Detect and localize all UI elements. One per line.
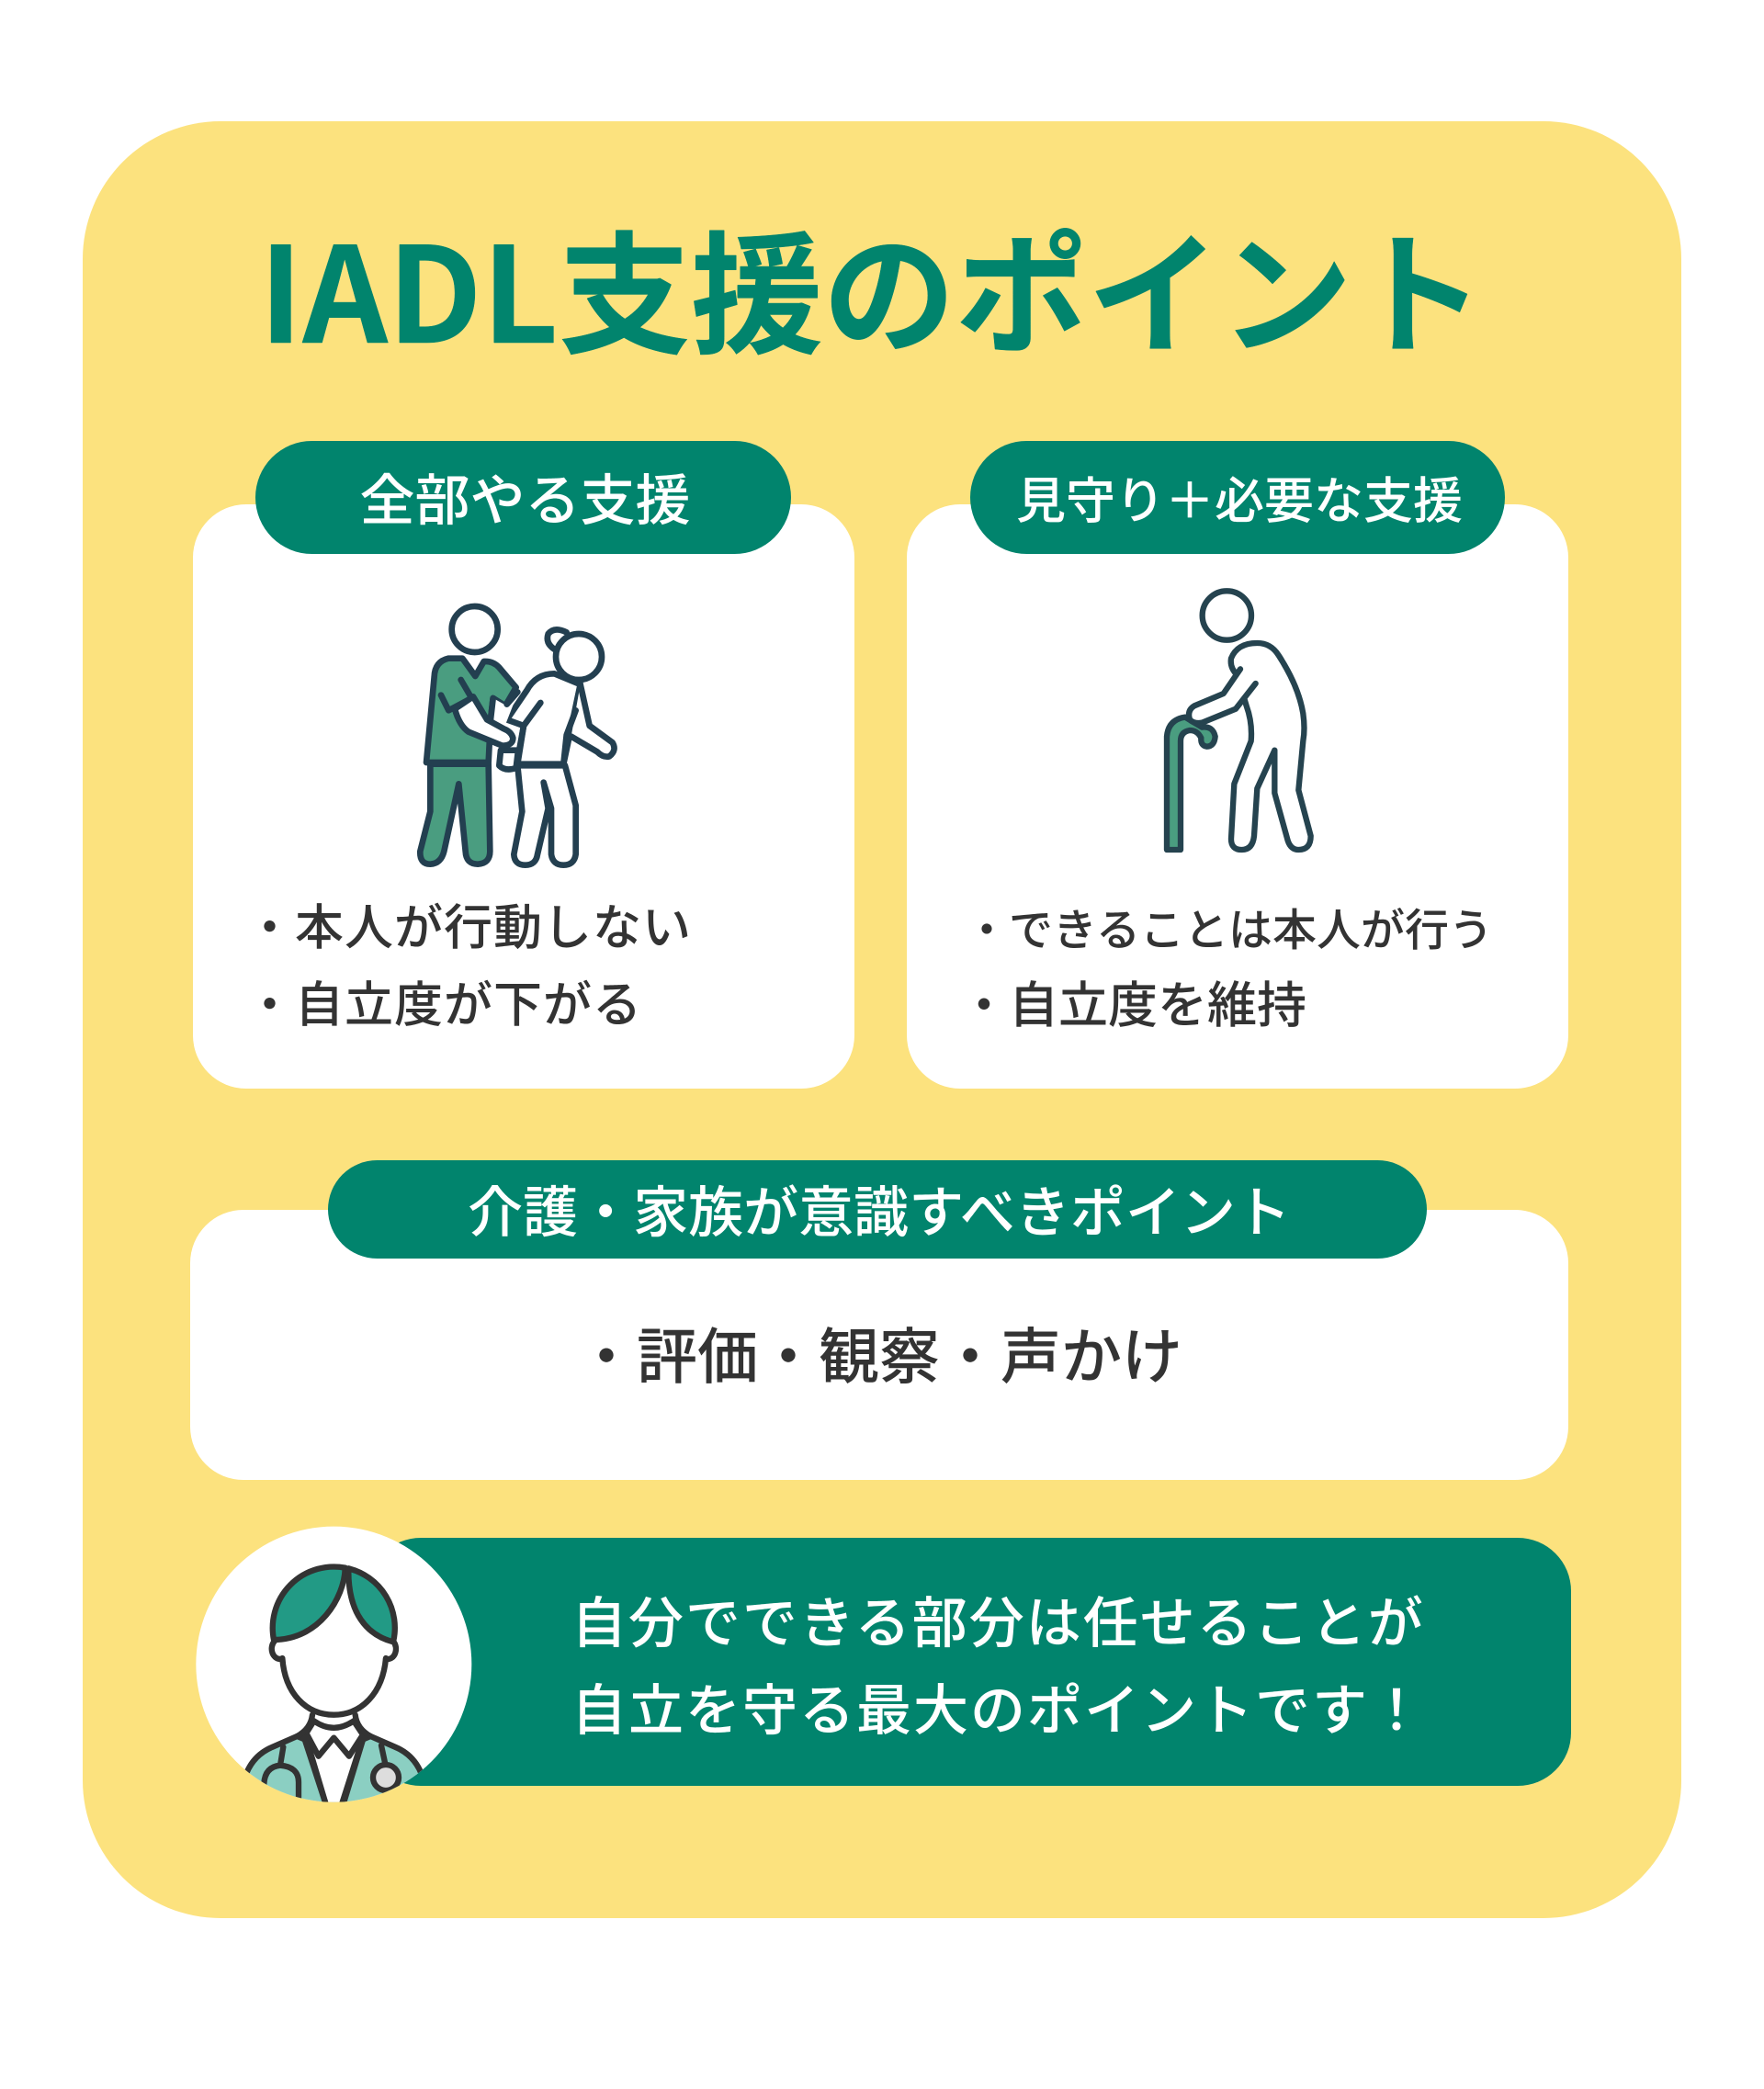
bullet: maintain independence: ・自立度を維持 bbox=[959, 965, 1306, 1037]
icon: elderly person with cane bbox=[1163, 588, 1314, 853]
line one: 自分でできる部分は任せることが bbox=[571, 1579, 1425, 1659]
icon: caregiver supporting patient bbox=[417, 603, 617, 868]
bullet: independence falls: ・自立度が下がる bbox=[245, 966, 642, 1036]
bullet: person does what they can: ・できることは本人が行う bbox=[965, 894, 1493, 958]
text: full support bullets bbox=[245, 889, 692, 1036]
icon: doctor avatar bbox=[196, 1527, 472, 1802]
text: closing message bbox=[571, 1579, 1426, 1746]
line two: 自立を守る最大のポイントです！ bbox=[571, 1666, 1426, 1746]
text: evaluation, observation, voice: ・評価・観察・声かけ bbox=[576, 1308, 1182, 1396]
panel: watch-over support card bbox=[907, 504, 1568, 1089]
heading text: full support: 全部やる支援 bbox=[360, 457, 691, 536]
heading text: watch-over support: 見守り＋必要な支援 bbox=[1016, 460, 1463, 533]
panel: points to keep in mind card bbox=[190, 1210, 1568, 1480]
heading pill: watch-over support bbox=[970, 441, 1505, 554]
bullet: does not act: ・本人が行動しない bbox=[245, 889, 692, 959]
panel: full support card bbox=[193, 504, 854, 1089]
panel: yellow background card bbox=[83, 121, 1681, 1918]
title: IADL支援のポイント bbox=[259, 190, 1485, 381]
panel: closing message bar bbox=[368, 1538, 1571, 1786]
heading text: points to keep in mind: 介護・家族が意識すべきポイント bbox=[468, 1169, 1291, 1248]
text: watch-over bullets bbox=[959, 894, 1493, 1037]
heading pill: points to keep in mind bbox=[328, 1160, 1427, 1259]
heading pill: full support bbox=[255, 441, 791, 554]
